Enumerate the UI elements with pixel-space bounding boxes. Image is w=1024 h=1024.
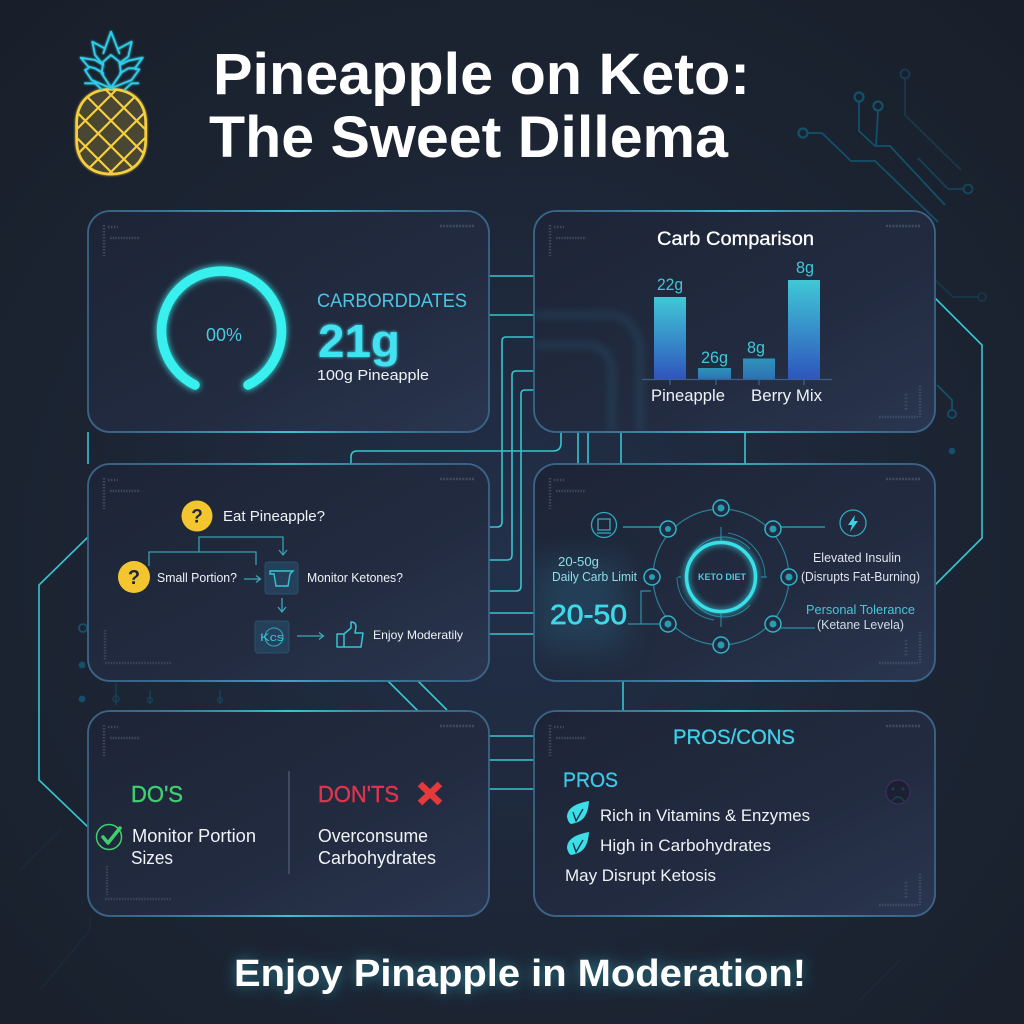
title: Pineapple on Keto:: [213, 42, 750, 107]
icon: lightning: [781, 510, 866, 536]
pros heading: PROS: [563, 769, 618, 792]
icon: check mark: [96, 824, 122, 850]
keto diet center label: KETO DIET: [698, 572, 746, 583]
icon: thumbs up: [337, 622, 363, 647]
panel: carb comparison chart: [534, 211, 935, 432]
elevated insulin text: Elevated Insulin: [813, 551, 901, 565]
question: eat pineapple: Eat Pineapple?: [223, 509, 325, 525]
circuit connectors between panels: [39, 276, 982, 827]
flow branch arrows: [149, 537, 287, 566]
bar chart: 8g: [747, 338, 765, 357]
gauge ring: [162, 271, 282, 385]
big carb limit number: [550, 591, 660, 630]
bar chart: 26g: [701, 348, 728, 367]
label: enjoy moderately: Enjoy Moderatily: [373, 628, 463, 642]
do's text: [131, 826, 256, 868]
don'ts text: Carbohydrates: [318, 848, 436, 868]
bar chart: 22g: [657, 275, 683, 294]
pros/cons heading: PROS/CONS: [673, 726, 795, 749]
arrow: [297, 632, 324, 640]
bar chart: [642, 258, 832, 405]
pros item 2: High in Carbohydrates: [600, 836, 771, 855]
pros item 1: Rich in Vitamins & Enzymes: [600, 806, 810, 825]
cons item: May Disrupt Ketosis: [565, 866, 716, 885]
orbit nodes: [644, 500, 797, 653]
do's text: Sizes: [131, 848, 173, 868]
question: small portion: ?: [128, 567, 140, 589]
icon: ketone cycle: Kcs: [260, 632, 285, 644]
question: small portion: [118, 561, 237, 593]
don'ts heading: DON'TS: [318, 781, 399, 807]
bar chart: Pineapple: [651, 387, 725, 405]
panel: decision flowchart: [88, 464, 489, 681]
big carb limit number: 20-50: [550, 599, 627, 630]
label: monitor ketones: Monitor Ketones?: [307, 571, 403, 585]
pineapple crown: [81, 32, 143, 89]
arrow: [278, 598, 286, 612]
carb limit text: [552, 554, 637, 584]
personal tolerance text: Personal Tolerance: [806, 603, 915, 617]
don'ts text: Overconsume: [318, 826, 428, 846]
gauge ring: 00%: [206, 324, 242, 345]
bar chart: Berry Mix: [751, 387, 823, 405]
icon: leaf 1: [567, 801, 589, 824]
question: eat pineapple: ?: [191, 506, 203, 528]
do's text: Monitor Portion: [132, 826, 256, 846]
icon: ketone cycle: [255, 621, 289, 653]
carbohydrates stat: [317, 291, 467, 384]
panel: pros and cons: [534, 711, 935, 916]
footer tagline: Enjoy Pinapple in Moderation!: [234, 953, 806, 995]
icon: leaf 2: [567, 832, 589, 855]
icon: measuring cup: [265, 562, 298, 594]
title: The Sweet Dillema: [209, 105, 729, 170]
arrow: [244, 576, 260, 582]
title: [209, 42, 750, 170]
elevated insulin text: [801, 551, 920, 584]
carb limit text: 20-50g: [558, 554, 599, 569]
carbohydrates stat: CARBORDDATES: [317, 291, 467, 312]
question: eat pineapple: [182, 500, 325, 532]
icon: neon pineapple: [0, 32, 229, 180]
question: small portion: Small Portion?: [157, 571, 237, 585]
icon: sad face: [886, 780, 910, 804]
elevated insulin text: (Disrupts Fat-Burning): [801, 570, 920, 584]
carbohydrates stat: 100g Pineapple: [317, 367, 429, 384]
carb limit text: Daily Carb Limit: [552, 569, 637, 584]
pineapple body: [74, 87, 149, 178]
personal tolerance text: [781, 603, 915, 632]
personal tolerance text: (Ketane Levela): [817, 618, 904, 632]
carbohydrates stat: 21g: [318, 315, 400, 367]
do's heading: DO'S: [131, 781, 183, 807]
panel: carbohydrates gauge: [88, 211, 489, 432]
chart title: Carb Comparison: [657, 229, 814, 250]
keto orbit ring: [653, 509, 789, 645]
panel: do's and don'ts: [88, 711, 489, 916]
icon: monitor: [592, 512, 660, 538]
icon: red cross: [420, 784, 440, 803]
bar chart: 8g: [796, 258, 814, 277]
don'ts text: [318, 826, 436, 868]
panel: keto diet wheel: [534, 464, 935, 681]
